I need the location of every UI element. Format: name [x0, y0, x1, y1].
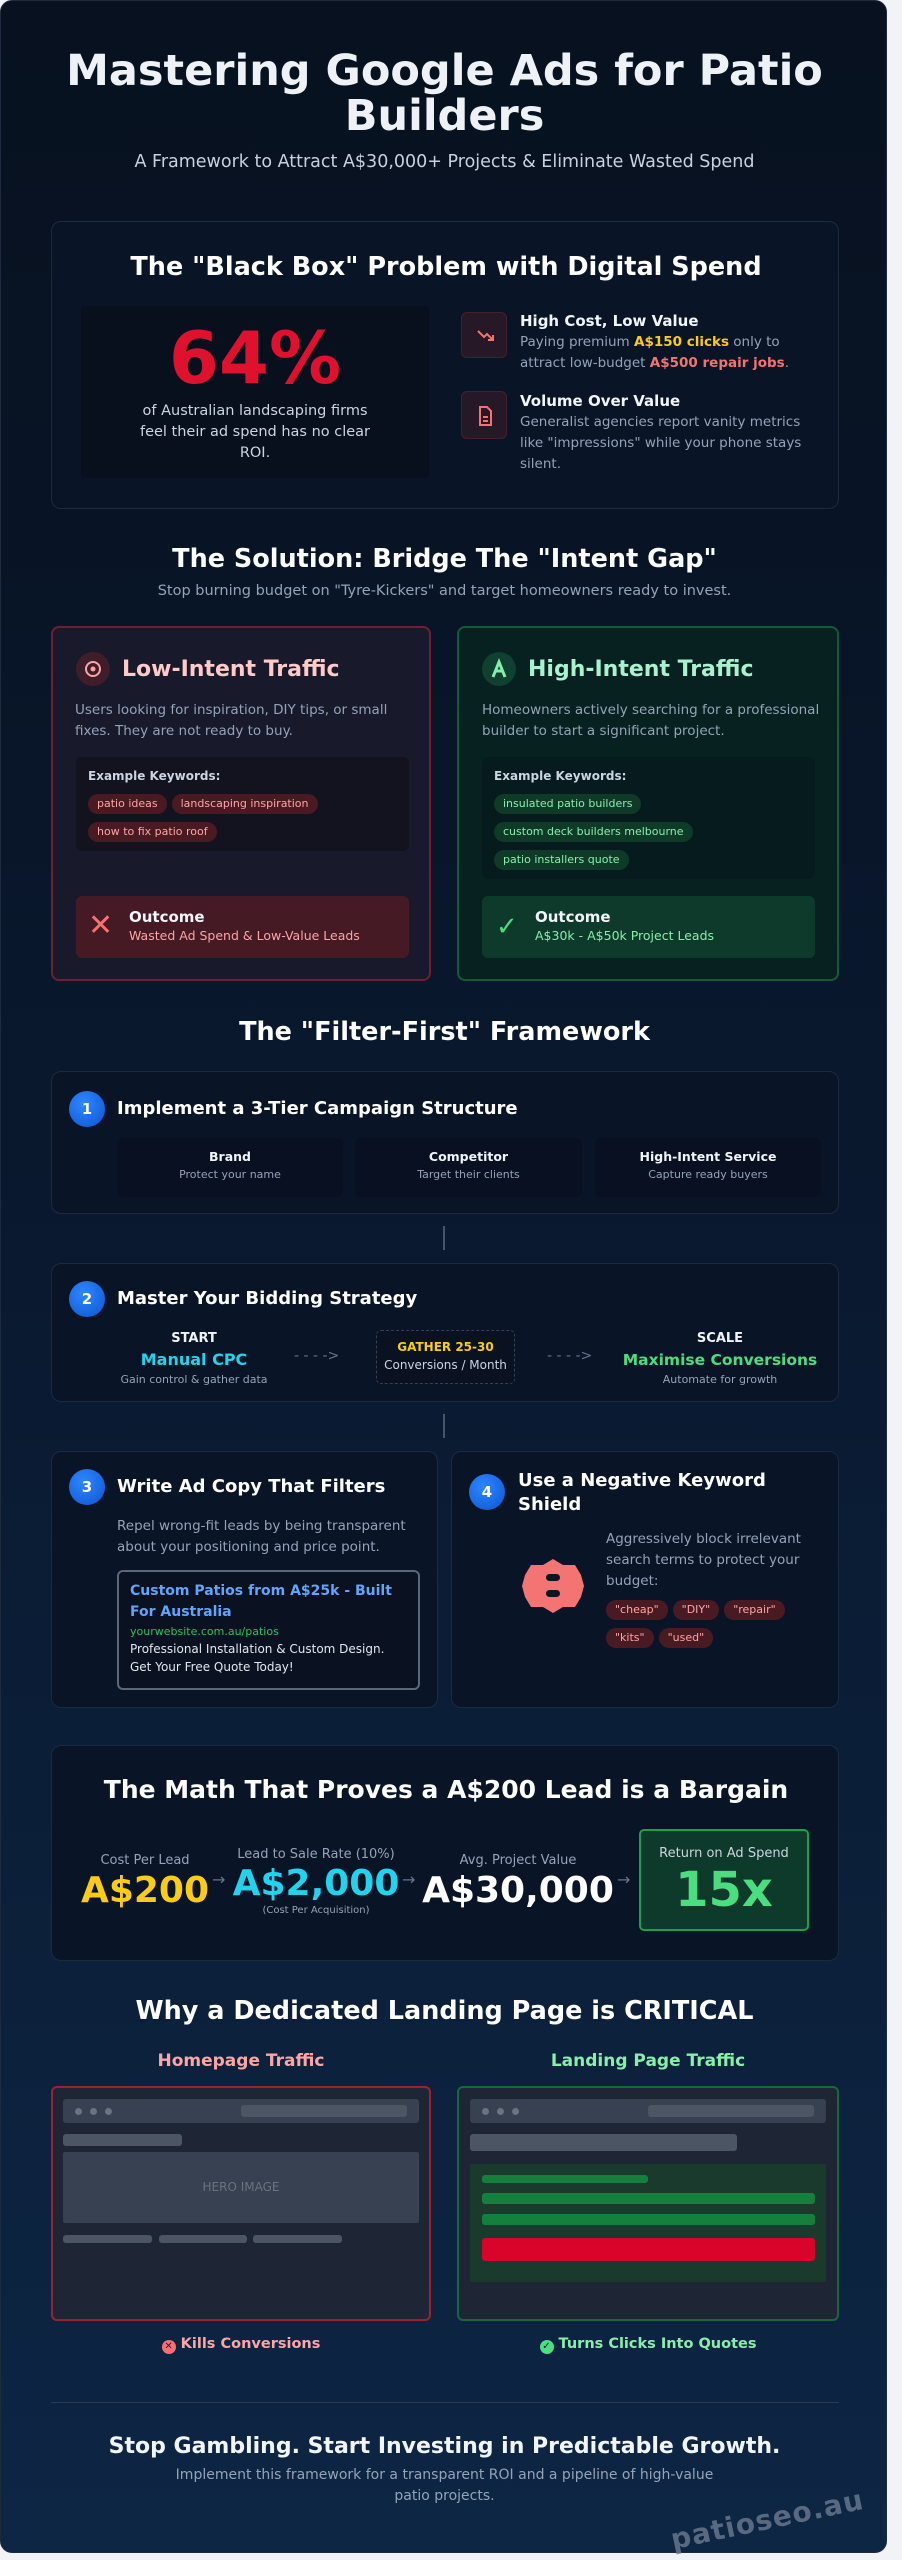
keywords box low: landscaping inspiration [181, 797, 309, 810]
step 4 text and tags: "repair" [733, 1603, 776, 1616]
stat box 64% [81, 306, 429, 478]
form area [470, 2164, 826, 2282]
keywords box low: Example Keywords: [88, 769, 220, 783]
title: Builders [345, 91, 544, 141]
panel: step 4 [451, 1451, 839, 1708]
cost per acquisition: A$2,000 [233, 1863, 399, 1904]
outcome high: ✓ [496, 912, 518, 942]
keywords box high: insulated patio builders [503, 797, 632, 810]
gather box: Conversions / Month [384, 1358, 507, 1372]
outcome high [482, 896, 815, 958]
icon: trend down [461, 312, 507, 358]
label homepage: Homepage Traffic [157, 2051, 325, 2071]
tier: competitor [355, 1138, 582, 1197]
high intent title: High-Intent Traffic [528, 657, 753, 682]
arrow: → [212, 1870, 225, 1889]
scale: maximise conversions: SCALE [697, 1331, 743, 1346]
arrow: → [402, 1870, 415, 1889]
ad preview: Custom Patios from A$25k - Built For Australia [130, 1583, 392, 1620]
icon: document [461, 391, 507, 439]
title: Mastering Google Ads for Patio [66, 46, 823, 96]
high intent desc: Homeowners actively searching for a professional builder to start a significant project. [482, 702, 819, 739]
point: high cost [520, 312, 789, 371]
tier: high intent [595, 1138, 821, 1197]
roas box: 15x [675, 1862, 773, 1918]
mockup: landing page [457, 2086, 839, 2321]
title [66, 46, 823, 141]
subtitle: A Framework to Attract A$30,000+ Projects & Eliminate Wasted Spend [134, 152, 754, 172]
footer heading: Stop Gambling. Start Investing in Predictable Growth. [109, 2434, 780, 2459]
outcome low: Wasted Ad Spend & Low-Value Leads [129, 928, 360, 943]
tier: brand: Protect your name [179, 1168, 281, 1181]
heading: framework: The "Filter-First" Framework [239, 1017, 650, 1047]
keywords box high: patio installers quote [503, 853, 620, 866]
number 4: 4 [482, 1483, 492, 1501]
start: manual cpc [120, 1331, 268, 1386]
icon: shield [522, 1559, 584, 1613]
scale: maximise conversions: Automate for growth [663, 1373, 777, 1386]
point: volume over value: Generalist agencies report vanity metrics like "impressions" while your phone stays silent. [520, 414, 801, 472]
number 4 [469, 1474, 505, 1510]
number 1 [69, 1091, 105, 1127]
icon: arrow up [482, 652, 516, 686]
ad preview [117, 1570, 420, 1690]
footer text: Implement this framework for a transparent ROI and a pipeline of high-value patio projects. [176, 2467, 713, 2504]
ad preview: yourwebsite.com.au/patios [130, 1625, 279, 1638]
outcome low: ✕ [88, 908, 113, 943]
tier: high intent: High-Intent Service [640, 1149, 776, 1164]
step 4 text and tags: "kits" [615, 1631, 645, 1644]
outcome high: Outcome [535, 908, 611, 926]
step 4 text and tags: "cheap" [615, 1603, 659, 1616]
low intent desc: Users looking for inspiration, DIY tips, or small fixes. They are not ready to buy. [75, 702, 387, 739]
scale: maximise conversions [623, 1331, 817, 1386]
panel: high intent [457, 626, 839, 981]
hero image placeholder [63, 2152, 419, 2223]
heading: landing page: Why a Dedicated Landing Page is CRITICAL [135, 1996, 754, 2026]
roas box [639, 1829, 809, 1931]
tier: brand: Brand [209, 1149, 251, 1164]
hero image placeholder: HERO IMAGE [202, 2180, 279, 2194]
step 3 desc: Repel wrong-fit leads by being transparent about your positioning and price point. [117, 1518, 406, 1555]
panel: low intent [51, 626, 431, 981]
caption: kills conversions: ✕ [164, 2341, 173, 2352]
low intent title: Low-Intent Traffic [122, 657, 340, 682]
solution subtitle: Stop burning budget on "Tyre-Kickers" and target homeowners ready to invest. [158, 583, 731, 599]
stat box 64%: 64% [169, 316, 341, 400]
tier: high intent: Capture ready buyers [648, 1168, 768, 1181]
step 2 title: Master Your Bidding Strategy [117, 1288, 417, 1309]
stat box 64%: of Australian landscaping firms feel their ad spend has no clear ROI. [140, 403, 370, 461]
ad preview: Professional Installation & Custom Design. Get Your Free Quote Today! [130, 1642, 384, 1674]
icon: eye [76, 652, 110, 686]
step 1 title: Implement a 3-Tier Campaign Structure [117, 1098, 518, 1119]
panel: math [51, 1745, 839, 1961]
outcome low [76, 896, 409, 958]
cost per acquisition [232, 1847, 399, 1916]
step 4 title: Use a Negative Keyword Shield [518, 1470, 766, 1515]
panel: step 1 [51, 1071, 839, 1214]
number 3: 3 [82, 1478, 92, 1496]
cost per lead: Cost Per Lead [100, 1853, 190, 1868]
cost per acquisition: Lead to Sale Rate (10%) [237, 1847, 395, 1862]
outcome high: A$30k - A$50k Project Leads [535, 928, 714, 943]
number 2 [69, 1281, 105, 1317]
heading: math: The Math That Proves a A$200 Lead is a Bargain [104, 1775, 788, 1804]
label landing: Landing Page Traffic [551, 2051, 745, 2071]
project value: Avg. Project Value [460, 1853, 576, 1868]
point: volume over value: Volume Over Value [520, 392, 680, 410]
point: high cost: Paying premium A$150 clicks only to attract low-budget A$500 repair jobs. [520, 334, 789, 371]
panel: step 2 [51, 1263, 839, 1402]
step 4 text and tags: "used" [668, 1631, 704, 1644]
caption: turns clicks: ✓ [542, 2341, 551, 2352]
panel: black box problem [51, 221, 839, 509]
caption: kills conversions: Kills Conversions [181, 2336, 320, 2352]
keywords box low [76, 757, 409, 851]
keywords box low: how to fix patio roof [97, 825, 208, 838]
cost per lead: A$200 [81, 1870, 209, 1911]
mockup: homepage [51, 2086, 431, 2321]
start: manual cpc: Manual CPC [141, 1350, 247, 1369]
number 3 [69, 1469, 105, 1505]
step 3 title: Write Ad Copy That Filters [117, 1476, 385, 1497]
gather box: GATHER 25-30 [397, 1340, 494, 1354]
tier: competitor: Competitor [429, 1149, 508, 1164]
arrow: - - - -> [294, 1348, 339, 1364]
scale: maximise conversions: Maximise Conversions [623, 1351, 817, 1369]
watermark: patioseo.au [668, 2483, 867, 2556]
roas box: Return on Ad Spend [659, 1846, 789, 1861]
keywords box high: custom deck builders melbourne [503, 825, 684, 838]
keywords box high [482, 757, 815, 879]
gather box [376, 1330, 515, 1384]
step 4 text and tags: Aggressively block irrelevant search terms to protect your budget: [606, 1531, 801, 1589]
keywords box low: patio ideas [97, 797, 158, 810]
tier: competitor: Target their clients [417, 1168, 520, 1181]
outcome low: Outcome [129, 908, 205, 926]
panel: step 3 [51, 1451, 438, 1708]
heading: black box: The "Black Box" Problem with Digital Spend [130, 252, 762, 282]
keywords box high: Example Keywords: [494, 769, 626, 783]
project value: A$30,000 [422, 1870, 614, 1911]
caption: turns clicks: Turns Clicks Into Quotes [559, 2336, 756, 2352]
heading: solution: The Solution: Bridge The "Intent Gap" [172, 544, 717, 574]
number 2: 2 [82, 1290, 92, 1308]
point: high cost: High Cost, Low Value [520, 312, 699, 330]
arrow: → [617, 1870, 630, 1889]
tier: brand [117, 1138, 343, 1197]
number 1: 1 [82, 1100, 92, 1118]
arrow: - - - -> [547, 1348, 592, 1364]
step 4 text and tags: "DIY" [682, 1603, 710, 1616]
start: manual cpc: START [171, 1331, 217, 1346]
step 4 text and tags [606, 1531, 801, 1648]
start: manual cpc: Gain control & gather data [120, 1373, 268, 1386]
cost per acquisition: (Cost Per Acquisition) [262, 1905, 370, 1916]
